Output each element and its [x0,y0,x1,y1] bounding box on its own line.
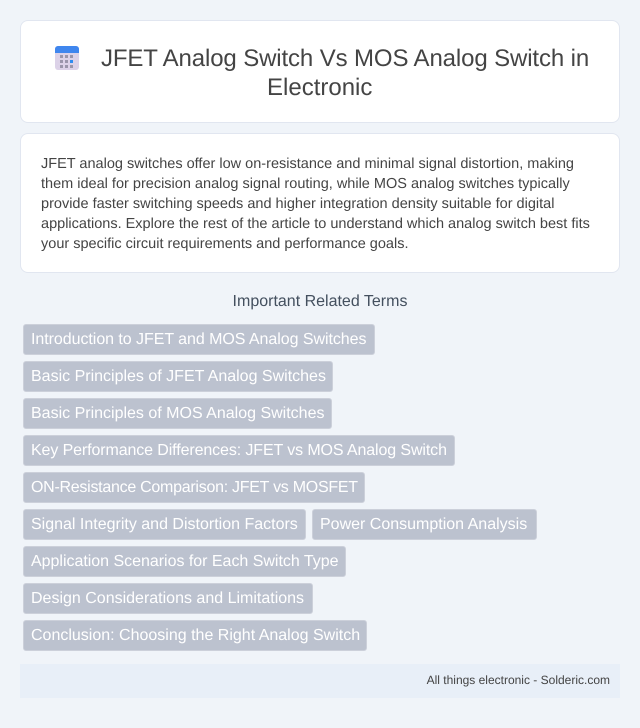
tag: MOS principles: Basic Principles of MOS Analog Switches [31,405,324,422]
tag: conclusion [23,620,367,651]
intro paragraph: your specific circuit requirements and performance goals. [41,236,408,252]
footer bar [20,664,620,698]
tag: MOS principles [23,398,332,429]
tag: performance differences: Key Performance Differences: JFET vs MOS Analog Switch [31,442,447,459]
tag: signal integrity [23,509,306,540]
header panel [20,20,620,123]
title [101,45,589,101]
tag: JFET principles: Basic Principles of JFET Analog Switches [31,368,326,385]
tag: on-resistance [23,472,365,503]
tag: signal integrity: Signal Integrity and Distortion Factors [31,516,298,533]
tag: JFET principles [23,361,333,392]
intro paragraph: them ideal for precision analog signal routing, while MOS analog switches typically [41,176,570,192]
tag: application scenarios: Application Scenarios for Each Switch Type [31,553,338,570]
tag: power consumption [312,509,537,540]
intro paragraph: JFET analog switches offer low on-resistance and minimal signal distortion, making [41,156,574,172]
tag: application scenarios [23,546,346,577]
tag: design considerations: Design Considerations and Limitations [31,590,304,607]
icon: calendar grid [55,46,79,70]
intro paragraph: provide faster switching speeds and higher integration density suitable for digital [41,196,554,212]
intro text panel [20,133,620,273]
tag: on-resistance: ON-Resistance Comparison: JFET vs MOSFET [31,479,358,496]
tag: conclusion: Conclusion: Choosing the Right Analog Switch [31,627,360,644]
tag: design considerations [23,583,313,614]
tag: power consumption: Power Consumption Analysis [320,516,527,533]
tag: introduction: Introduction to JFET and MOS Analog Switches [31,331,366,348]
title: Electronic [267,74,372,101]
intro paragraph [41,156,590,252]
intro paragraph: applications. Explore the rest of the article to understand which analog switch best fits [41,216,590,232]
tag: introduction [23,324,375,355]
related terms heading: Important Related Terms [233,293,407,310]
footer credit: All things electronic - Solderic.com [427,673,610,687]
title: JFET Analog Switch Vs MOS Analog Switch in [101,45,589,72]
tag: performance differences [23,435,455,466]
